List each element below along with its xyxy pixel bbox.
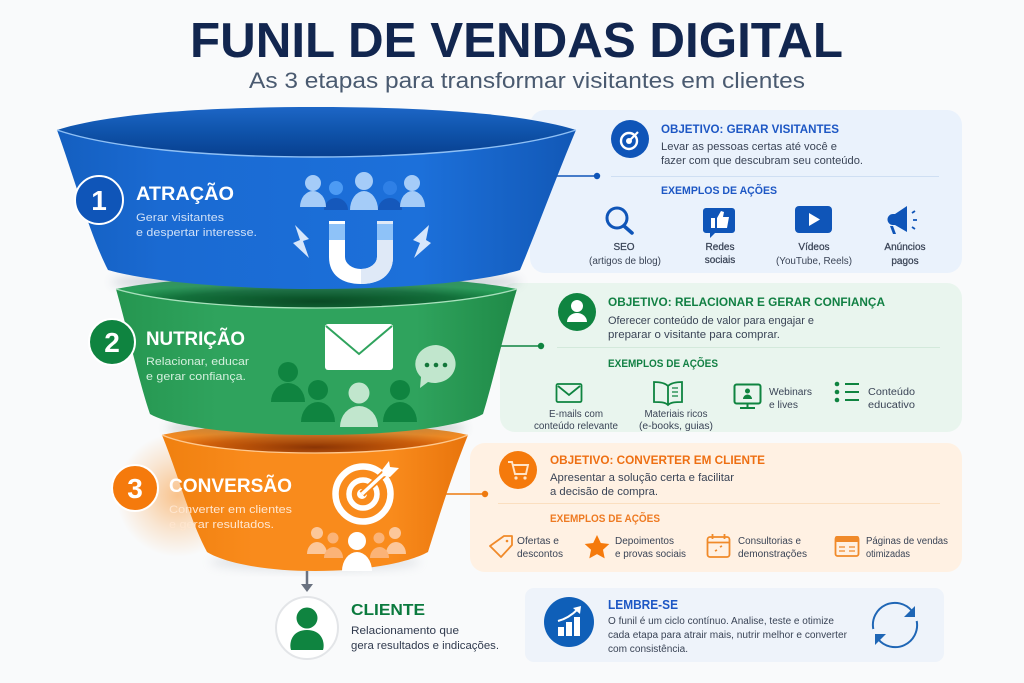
objective heading: OBJETIVO: GERAR VISITANTES	[661, 122, 839, 136]
action: consultorias	[708, 534, 807, 560]
subtitle: As 3 etapas para transformar visitantes em clientes	[249, 68, 805, 93]
step 1 label: Gerar visitantes	[136, 212, 225, 224]
step 3 label: CONVERSÃO	[169, 475, 292, 497]
action: webinars: Webinars	[769, 387, 812, 398]
reminder text: com consistência.	[608, 644, 688, 655]
reminder text: O funil é um ciclo contínuo. Analise, teste e otimize	[608, 616, 834, 627]
action: SEO: (artigos de blog)	[589, 256, 661, 267]
icon: cycle arrows	[873, 603, 917, 647]
action: emails: E-mails com	[549, 409, 603, 420]
step 3 label: Converter em clientes	[169, 504, 293, 516]
step 2 label: e gerar confiança.	[146, 371, 246, 383]
step 2 badge: 2	[104, 327, 120, 358]
title: FUNIL DE VENDAS DIGITAL	[190, 14, 843, 68]
step 2 label: NUTRIÇÃO	[146, 328, 245, 350]
step 3 label: e gerar resultados.	[169, 519, 274, 531]
icon: target with arrow	[336, 461, 399, 522]
action: anuncios pagos: Anúncios	[884, 242, 926, 253]
panel: objetivo relacionar	[500, 283, 962, 432]
action: materiais ricos	[639, 382, 713, 432]
icon: target badge	[611, 120, 649, 158]
objective heading: OBJETIVO: RELACIONAR E GERAR CONFIANÇA	[608, 295, 885, 309]
examples heading: EXEMPLOS DE AÇÕES	[661, 184, 777, 197]
step 1 badge: 1	[91, 185, 107, 216]
examples heading: EXEMPLOS DE AÇÕES	[608, 357, 718, 370]
action: conteudo educativo: Conteúdo	[868, 387, 915, 398]
reminder text	[608, 616, 848, 655]
reminder heading: LEMBRE-SE	[608, 597, 678, 612]
action: materiais ricos: Materiais ricos	[644, 409, 708, 420]
panel: lembre-se	[525, 588, 944, 662]
panel: objetivo gerar visitantes	[530, 110, 962, 273]
objective description: Oferecer conteúdo de valor para engajar e	[608, 315, 814, 327]
step 3 label	[169, 475, 293, 531]
icon: cart badge	[499, 451, 537, 489]
icon: envelope	[325, 324, 393, 370]
step 1 label	[136, 183, 257, 239]
action: depoimentos: Depoimentos	[615, 536, 674, 547]
action: materiais ricos: (e-books, guias)	[639, 421, 713, 432]
action: paginas de vendas: Páginas de vendas	[866, 536, 948, 547]
objective heading: OBJETIVO: CONVERTER EM CLIENTE	[550, 453, 765, 467]
step 1 badge	[75, 176, 123, 224]
objective description: fazer com que descubram seu conteúdo.	[661, 155, 863, 167]
glow behind step 3	[116, 433, 240, 557]
funnel: orange section	[162, 424, 468, 571]
icon: growth chart	[544, 597, 594, 647]
client label	[351, 602, 499, 652]
icon: magnet	[329, 221, 393, 284]
objective description: a decisão de compra.	[550, 486, 658, 498]
action: conteudo educativo: educativo	[868, 400, 915, 411]
icon: lightning right	[413, 225, 431, 258]
icon: person badge	[558, 293, 596, 331]
action: SEO	[589, 208, 661, 267]
icon: customers	[307, 527, 406, 571]
action: emails	[534, 384, 618, 432]
icon: client	[276, 597, 338, 659]
objective description	[550, 472, 734, 498]
action: videos	[776, 206, 852, 267]
icon: community	[271, 362, 417, 427]
action: webinars: e lives	[769, 400, 798, 411]
action: videos: (YouTube, Reels)	[776, 256, 852, 267]
examples heading: EXEMPLOS DE AÇÕES	[550, 512, 660, 525]
objective description	[661, 141, 863, 167]
action: anuncios pagos	[884, 206, 926, 267]
action: depoimentos: e provas sociais	[615, 549, 686, 560]
connector: attraction	[555, 173, 600, 179]
client label: CLIENTE	[351, 602, 425, 619]
action: consultorias: Consultorias e	[738, 536, 801, 547]
step 2 label: Relacionar, educar	[146, 356, 249, 368]
action: anuncios pagos: pagos	[891, 256, 919, 267]
connector: nurture	[498, 343, 544, 349]
action: ofertas	[490, 536, 563, 560]
step 1 label: ATRAÇÃO	[136, 183, 234, 205]
action: consultorias: demonstrações	[738, 549, 807, 560]
action: redes sociais: sociais	[705, 255, 735, 266]
action: redes sociais: Redes	[706, 242, 734, 253]
step 1 label: e despertar interesse.	[136, 227, 257, 239]
objective description: Levar as pessoas certas até você e	[661, 141, 837, 153]
action: paginas de vendas	[835, 536, 948, 560]
panel: objetivo converter	[470, 443, 962, 572]
action: conteudo educativo	[835, 382, 915, 411]
action: SEO: SEO	[613, 242, 635, 253]
funnel: blue section	[57, 107, 576, 291]
client label: gera resultados e indicações.	[351, 640, 499, 652]
step 2 badge	[89, 319, 135, 365]
step 3 badge	[112, 465, 158, 511]
action: ofertas: descontos	[517, 549, 563, 560]
step 2 label	[146, 328, 249, 383]
action: ofertas: Ofertas e	[517, 536, 559, 547]
action: videos: Vídeos	[798, 242, 830, 253]
arrow to client	[301, 571, 313, 592]
objective description	[608, 315, 814, 341]
connector: conversion	[445, 491, 488, 497]
icon: audience	[300, 172, 425, 210]
reminder text: cada etapa para atrair mais, nutrir melhor e converter	[608, 630, 848, 641]
action: paginas de vendas: otimizadas	[866, 549, 910, 560]
action: depoimentos	[585, 535, 686, 560]
objective description: preparar o visitante para comprar.	[608, 329, 780, 341]
step 3 badge: 3	[127, 473, 143, 504]
client label: Relacionamento que	[351, 625, 459, 637]
action: emails: conteúdo relevante	[534, 421, 618, 432]
funnel: green section	[116, 275, 517, 438]
action: webinars	[734, 384, 812, 411]
action: redes sociais	[703, 208, 735, 266]
icon: chat bubble	[415, 345, 456, 388]
objective description: Apresentar a solução certa e facilitar	[550, 472, 734, 484]
icon: lightning left	[293, 225, 309, 258]
